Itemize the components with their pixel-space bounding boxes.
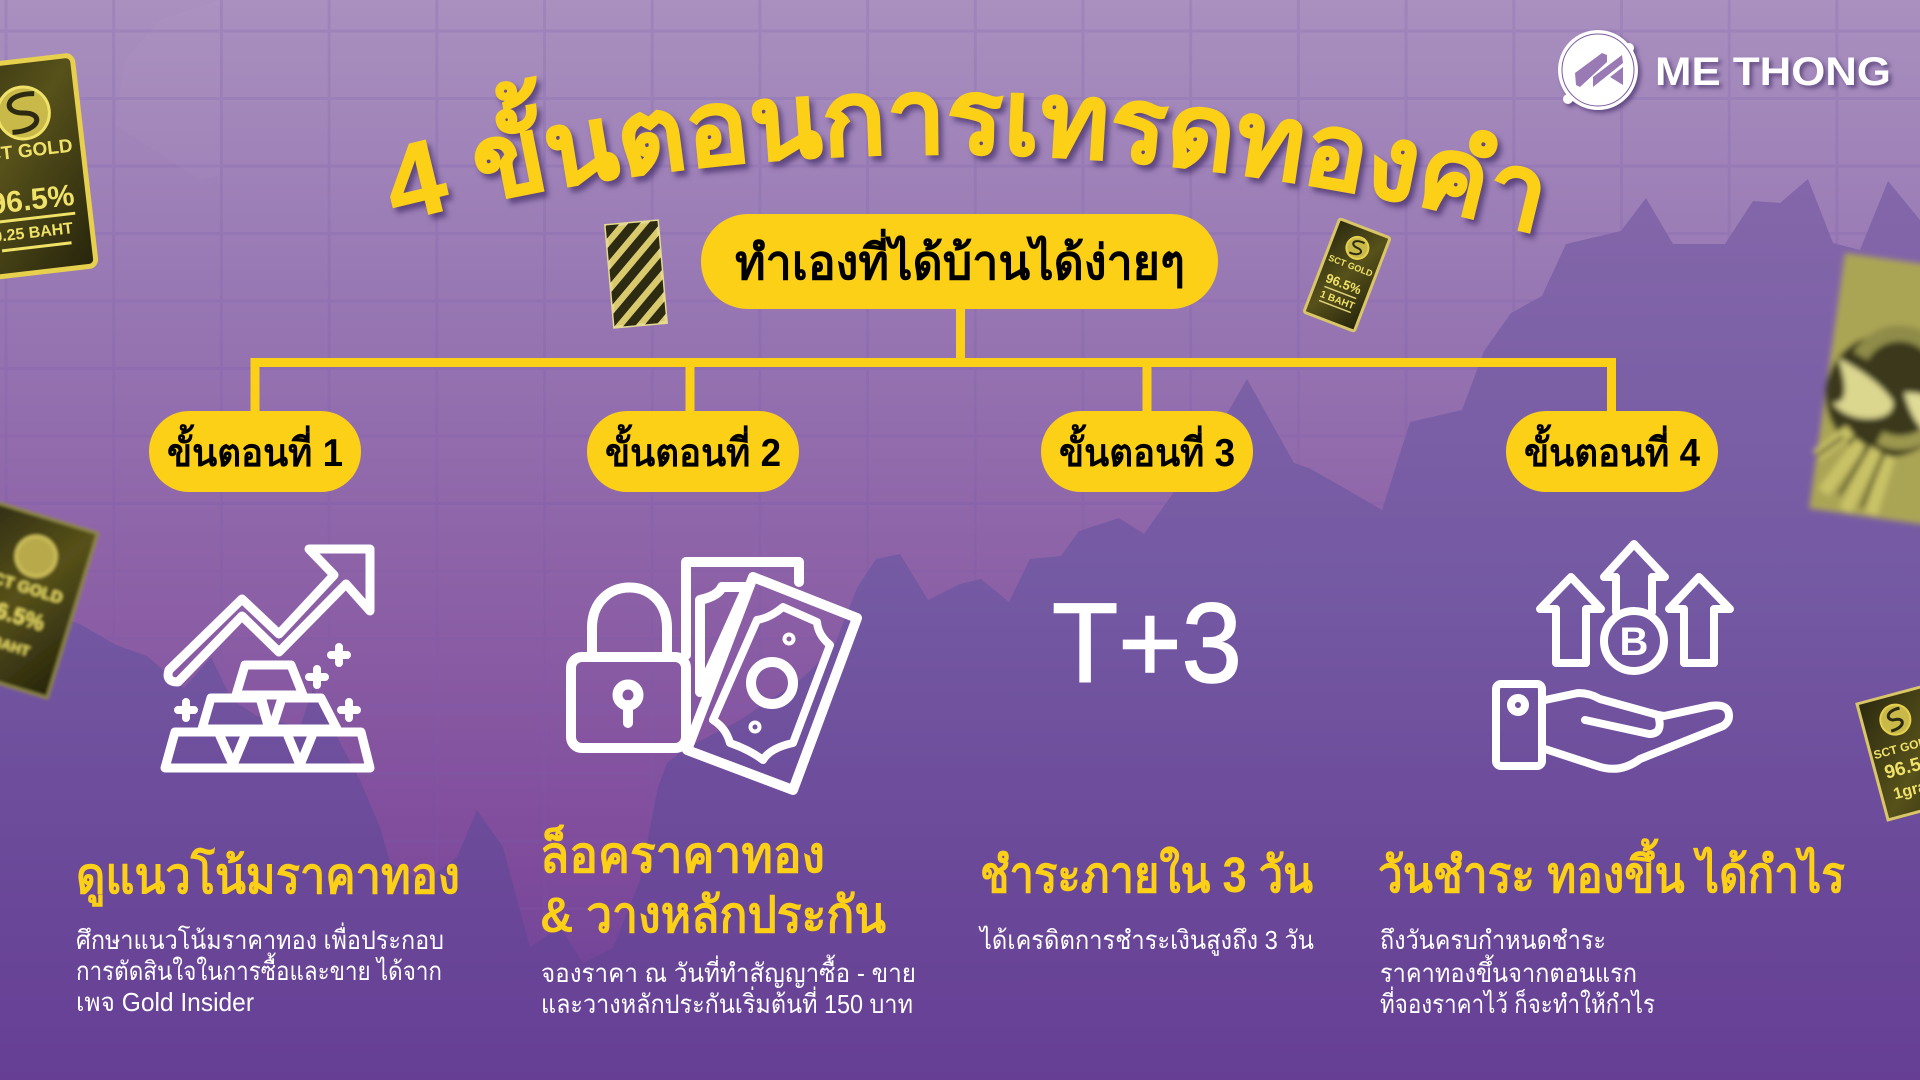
step pill 2: [587, 411, 799, 492]
body step 4: ที่จองราคาไว้ ก็จะทำให้กำไร: [1380, 986, 1655, 1019]
heading step 2: & วางหลักประกัน: [540, 887, 886, 943]
icon: padlock and banknotes: [571, 562, 857, 790]
heading step 1: ดูแนวโน้มราคาทอง: [76, 846, 460, 907]
step pill 1: [149, 411, 361, 492]
body step 3: ได้เครดิตการชำระเงินสูงถึง 3 วัน: [978, 925, 1314, 956]
step 4 text: [1378, 838, 1845, 1019]
heading step 3: ชำระภายใน 3 วัน: [980, 846, 1313, 903]
step pill 4: [1506, 411, 1718, 492]
gold bar: one baht: SCT GOLD: [1327, 253, 1375, 279]
step pill 2: ขั้นตอนที่ 2: [605, 424, 781, 475]
body step 1: ศึกษาแนวโน้มราคาทอง เพื่อประกอบ: [76, 922, 444, 955]
gold bar: striped: [604, 219, 668, 329]
body step 1: การตัดสินใจในการซื้อและขาย ได้จาก: [76, 952, 442, 986]
body step 1: [76, 922, 444, 1017]
logo: [1558, 30, 1891, 110]
subtitle pill: ทำเองที่ได้บ้านได้ง่ายๆ: [735, 228, 1185, 290]
heading step 2: [540, 824, 886, 943]
icon: rising arrow over gold bars: [165, 549, 370, 768]
gold bar: top left: [0, 55, 96, 285]
step pill 3: [1041, 411, 1253, 492]
connector tree: [255, 309, 1612, 411]
heading step 2: ล็อคราคาทอง: [540, 824, 825, 883]
step 2 text: [540, 824, 916, 1019]
icon: hand with rising arrows: B: [1620, 620, 1648, 664]
gold bar: right blurred: [1809, 253, 1920, 526]
icon: hand with rising arrows: [1496, 544, 1730, 769]
body step 2: [541, 954, 916, 1019]
step pill 1: ขั้นตอนที่ 1: [167, 424, 343, 475]
gold bar: lower right: [1857, 676, 1920, 820]
body step 1: เพจ Gold Insider: [76, 987, 254, 1017]
body step 4: [1380, 925, 1655, 1019]
logo: ME THONG: [1655, 50, 1891, 94]
T+3 label: T+3: [1052, 580, 1242, 706]
subtitle pill: [701, 214, 1218, 309]
heading step 4: วันชำระ ทองขึ้น ได้กำไร: [1378, 838, 1845, 903]
body step 4: ถึงวันครบกำหนดชำระ: [1380, 925, 1606, 955]
body step 2: และวางหลักประกันเริ่มต้นที่ 150 บาท: [541, 986, 913, 1019]
body step 2: จองราคา ณ วันที่ทำสัญญาซื้อ - ขาย: [541, 954, 916, 988]
step 1 text: [76, 846, 460, 1017]
gold bar: lower left blurred: [0, 498, 98, 698]
gold bar: one baht: [1304, 219, 1390, 331]
step pill 3: ขั้นตอนที่ 3: [1059, 424, 1235, 475]
gold bar: one baht: 1 BAHT: [1318, 289, 1356, 312]
body step 4: ราคาทองขึ้นจากตอนแรก: [1380, 954, 1637, 988]
title: 4 ขั้นตอนการเทรดทองคำ: [390, 76, 1548, 241]
step pill 4: ขั้นตอนที่ 4: [1524, 424, 1700, 475]
step 3 text: [978, 846, 1314, 956]
gold bar: one baht: 96.5%: [1324, 270, 1364, 298]
